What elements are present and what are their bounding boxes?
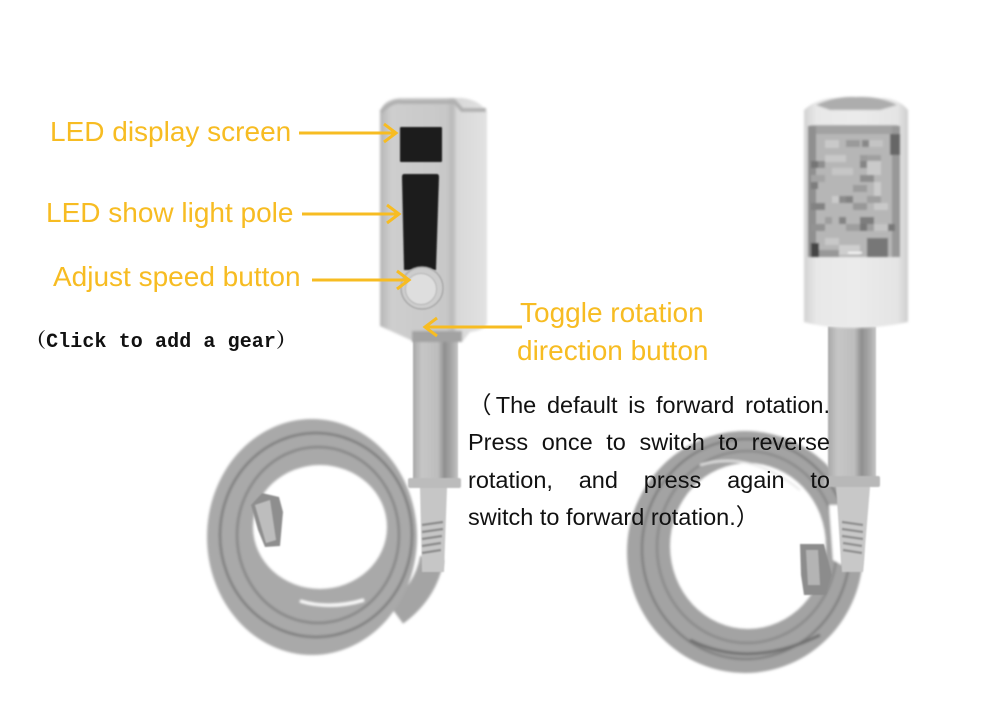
label: LED display screen: LED display screen	[50, 116, 291, 147]
text block: rotation explanation: switch to forward rotation.）	[468, 504, 759, 530]
left device: LED light pole	[402, 174, 439, 270]
right device: head with mosaic window	[804, 97, 908, 328]
text block: rotation explanation: rotation, and press again to	[468, 467, 830, 493]
arrow: to speed button	[312, 271, 409, 289]
left device: shaft and strain relief	[408, 335, 461, 572]
right device: cable coil	[627, 431, 863, 673]
left device: speed button	[401, 267, 443, 309]
arrow: to LED light pole	[302, 205, 399, 223]
left device: cable coil	[207, 419, 432, 655]
note: click to add a gear: （Click to add a gear）	[26, 330, 296, 354]
mosaic window	[808, 125, 900, 257]
left device: RJ45 connector	[251, 493, 283, 547]
arrow: to rotation button	[425, 318, 522, 336]
arrow: to LED display screen	[299, 124, 396, 142]
right device: shaft and strain relief	[824, 326, 880, 572]
label: toggle rotation direction button: direction button	[517, 335, 708, 366]
label: LED show light pole: LED show light pole	[46, 197, 293, 228]
text block: rotation explanation: （The default is forward rotation.	[468, 392, 830, 418]
label: toggle rotation direction button: Toggle rotation	[520, 297, 704, 328]
left device: control head	[380, 98, 487, 342]
right device: RJ45 connector	[800, 544, 832, 595]
label: Adjust speed button: Adjust speed button	[53, 261, 301, 292]
left device: LED display screen	[400, 127, 442, 162]
text block: rotation explanation: Press once to switch to reverse	[468, 429, 830, 455]
text block: rotation explanation	[468, 392, 830, 530]
label: toggle rotation direction button	[517, 297, 708, 366]
